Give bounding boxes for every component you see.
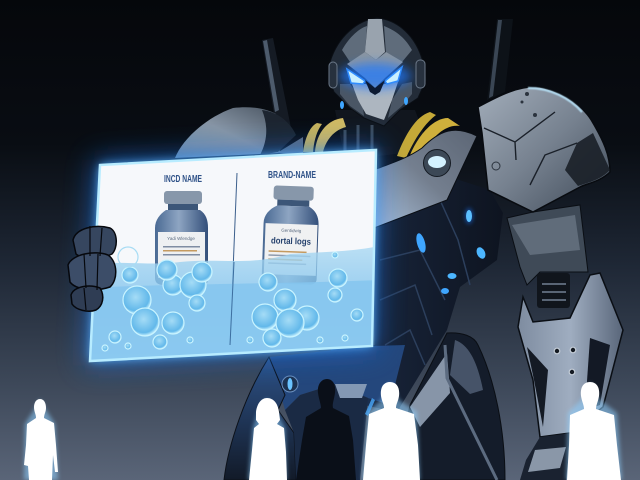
panel background	[90, 150, 376, 361]
person dark centre	[296, 379, 356, 480]
pauldron dark band	[565, 133, 610, 186]
yellow stripes right	[397, 112, 460, 164]
right leg side panel	[450, 340, 483, 394]
divider	[232, 173, 238, 284]
left leg	[224, 357, 296, 480]
panel contents	[85, 170, 380, 365]
water lower fill	[91, 280, 372, 360]
robot	[175, 18, 623, 480]
torso	[330, 178, 503, 412]
forearm bolts	[554, 347, 576, 375]
inner left plate	[285, 384, 368, 480]
bubble ring near hand	[118, 247, 138, 267]
antenna left	[262, 38, 291, 128]
person white centre-right	[363, 382, 420, 480]
chest light	[424, 150, 450, 176]
legs	[224, 333, 505, 480]
left shoulder	[175, 107, 303, 158]
pauldron bolts	[492, 92, 537, 170]
finger bottom	[71, 286, 103, 311]
person woman	[249, 398, 287, 480]
bottle: brand-name	[261, 185, 320, 285]
face plate	[352, 82, 398, 120]
right eye	[385, 67, 402, 84]
knee gem	[282, 376, 298, 392]
hip armour	[270, 345, 405, 410]
helmet	[329, 18, 426, 126]
right leg rim	[445, 345, 497, 480]
antenna right	[487, 19, 513, 100]
right arm grille	[537, 273, 570, 308]
panel: generic vs brand-name comparison	[85, 150, 380, 365]
helmet dome panels	[342, 26, 412, 62]
torso plating	[380, 200, 470, 365]
hand	[68, 226, 138, 311]
knuckle lines	[84, 226, 102, 310]
visor centre	[365, 80, 385, 95]
chest plate	[374, 130, 477, 228]
label: brand-name: Gentidwig	[281, 228, 302, 233]
helmet crest	[365, 19, 385, 60]
pauldron seams	[484, 112, 577, 185]
crotch plate	[335, 384, 367, 398]
divider through water	[230, 262, 234, 345]
right arm upper	[507, 205, 588, 285]
foot plate	[528, 447, 566, 472]
heading: brand-name: BRAND-NAME	[268, 170, 316, 181]
label: brand-name: dortal logs	[271, 235, 311, 247]
pauldron rim light	[528, 88, 582, 112]
water	[85, 246, 380, 365]
bottle: generic	[155, 191, 208, 285]
yellow stripes left	[303, 118, 346, 152]
neck detail	[345, 125, 372, 155]
forearm dark inlay right	[585, 338, 610, 410]
people silhouettes	[24, 379, 622, 480]
heading: generic: INCD NAME	[164, 174, 202, 185]
person far left	[24, 399, 58, 480]
finger top	[73, 226, 116, 258]
foot	[520, 433, 572, 480]
panel border	[90, 150, 376, 361]
wide panel glow	[85, 146, 380, 366]
tight panel glow	[90, 150, 376, 361]
right leg plate	[410, 353, 450, 427]
forehead	[347, 52, 403, 88]
label: brand-name	[264, 223, 318, 276]
blue lights	[365, 208, 487, 416]
left eye	[347, 69, 365, 84]
ear pods	[329, 60, 425, 88]
finger middle	[68, 253, 116, 290]
right pauldron	[478, 87, 610, 212]
neck	[335, 110, 430, 160]
person far right	[567, 382, 621, 480]
label: generic: Yadi Wlendge	[167, 236, 195, 241]
people glow	[24, 382, 622, 480]
eye glow	[339, 63, 411, 89]
side panels	[340, 82, 412, 118]
right forearm	[518, 273, 623, 437]
cheek lights	[340, 97, 408, 109]
right leg	[405, 333, 505, 480]
bubbles	[102, 252, 363, 351]
forearm dark inlay left	[527, 347, 548, 427]
